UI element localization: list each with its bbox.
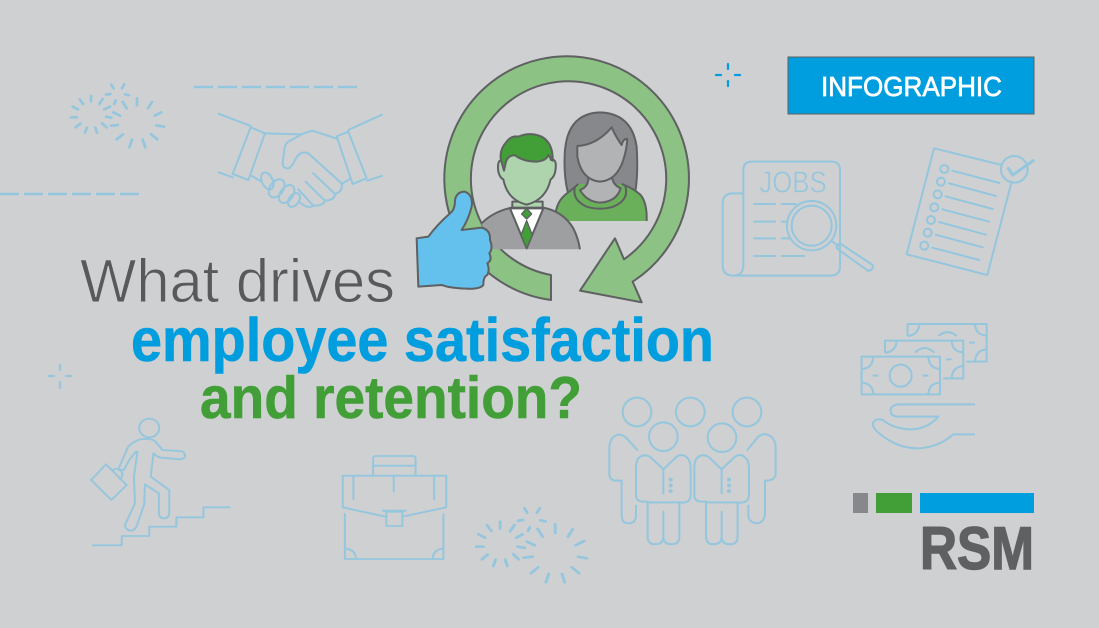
icon: jobs newspaper with magnifier	[723, 162, 873, 276]
woman	[555, 112, 647, 221]
icon: checklist	[907, 148, 1033, 275]
jobs heading: JOBS	[759, 165, 827, 199]
title line 1: What drives	[80, 247, 395, 315]
icon: thumbs up	[417, 192, 492, 289]
man	[482, 134, 580, 249]
icon: crosshair sparkle left	[49, 365, 71, 388]
icon: crosshair sparkle top right	[716, 64, 740, 86]
infographic badge: INFOGRAPHIC	[821, 71, 1002, 102]
dashed line: left	[0, 193, 139, 195]
title line 2: employee satisfaction	[131, 306, 714, 374]
icon: circular arrow with employees	[417, 56, 689, 302]
circular arrow	[444, 56, 689, 302]
infographic badge	[788, 57, 1034, 114]
icon: sparkle bottom	[476, 508, 587, 582]
icon: person climbing stairs	[91, 419, 230, 545]
icon: handshake	[219, 114, 382, 209]
title line 3: and retention?	[200, 365, 582, 431]
icon: team of people	[609, 398, 776, 544]
icon: hand holding money	[862, 324, 987, 448]
dashed line: top	[194, 86, 357, 88]
RSM logo: RSM	[920, 515, 1034, 582]
RSM logo	[853, 493, 1034, 582]
magnifier	[787, 201, 873, 271]
listing lines	[754, 204, 804, 256]
icon: briefcase	[343, 456, 446, 559]
icon: sparkle top left	[71, 84, 164, 147]
